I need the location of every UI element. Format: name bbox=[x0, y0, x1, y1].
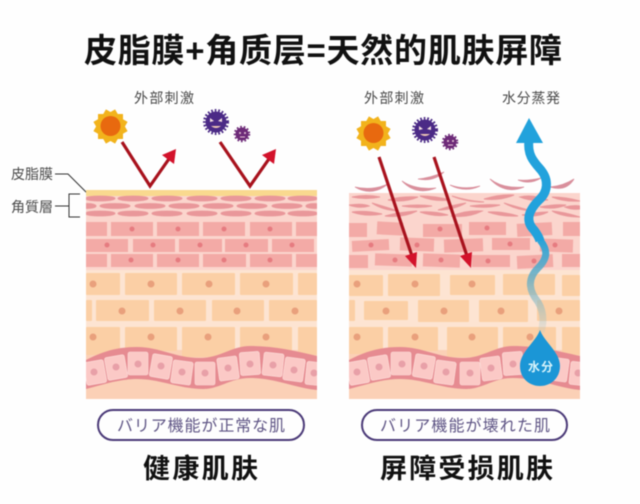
heading: water evaporation: 水分蒸発 bbox=[502, 90, 560, 106]
skin cross-section: damaged bbox=[346, 193, 589, 399]
arrow: water evaporating bbox=[516, 118, 546, 332]
caption: damaged barrier skin: 屏障受损肌肤 bbox=[380, 454, 553, 484]
title: 皮脂膜+角质层=天然的肌肤屏障 bbox=[84, 32, 562, 69]
skin cross-section: healthy bbox=[80, 190, 325, 399]
panel: healthy skin bbox=[80, 90, 325, 484]
label: sebum film with leader line bbox=[11, 166, 87, 193]
caption pill: broken barrier bbox=[362, 410, 567, 440]
label: stratum corneum with bracket bbox=[11, 194, 80, 217]
caption pill: normal barrier: バリア機能が正常な肌 bbox=[117, 417, 285, 435]
icon: large germ (left) bbox=[206, 112, 226, 132]
caption pill: normal barrier bbox=[98, 410, 304, 440]
heading: external stimuli (left): 外部刺激 bbox=[134, 90, 194, 106]
caption: healthy skin: 健康肌肤 bbox=[143, 454, 258, 484]
arrow: sunlight penetrating bbox=[379, 157, 417, 268]
icon: sun (right) bbox=[356, 116, 391, 151]
icon: small germ (right) bbox=[444, 136, 456, 148]
label: sebum film with leader line: 皮脂膜 bbox=[11, 166, 53, 182]
icon: water drop: 水分 bbox=[528, 359, 553, 374]
icon: water drop bbox=[520, 330, 560, 386]
caption pill: broken barrier: バリア機能が壊れた肌 bbox=[380, 417, 550, 435]
peeling sebum flakes bbox=[355, 172, 574, 191]
arrow: reflected sunlight bbox=[122, 142, 176, 186]
icon: sun (left) bbox=[93, 109, 128, 144]
arrow: germs penetrating bbox=[434, 157, 472, 268]
panel: damaged skin bbox=[346, 90, 589, 484]
icon: large germ (right) bbox=[414, 120, 436, 140]
heading: external stimuli (right): 外部刺激 bbox=[364, 90, 424, 106]
label: stratum corneum with bracket: 角質層 bbox=[11, 199, 53, 215]
icon: small germ (left) bbox=[236, 128, 248, 140]
arrow: reflected germs bbox=[220, 142, 276, 186]
